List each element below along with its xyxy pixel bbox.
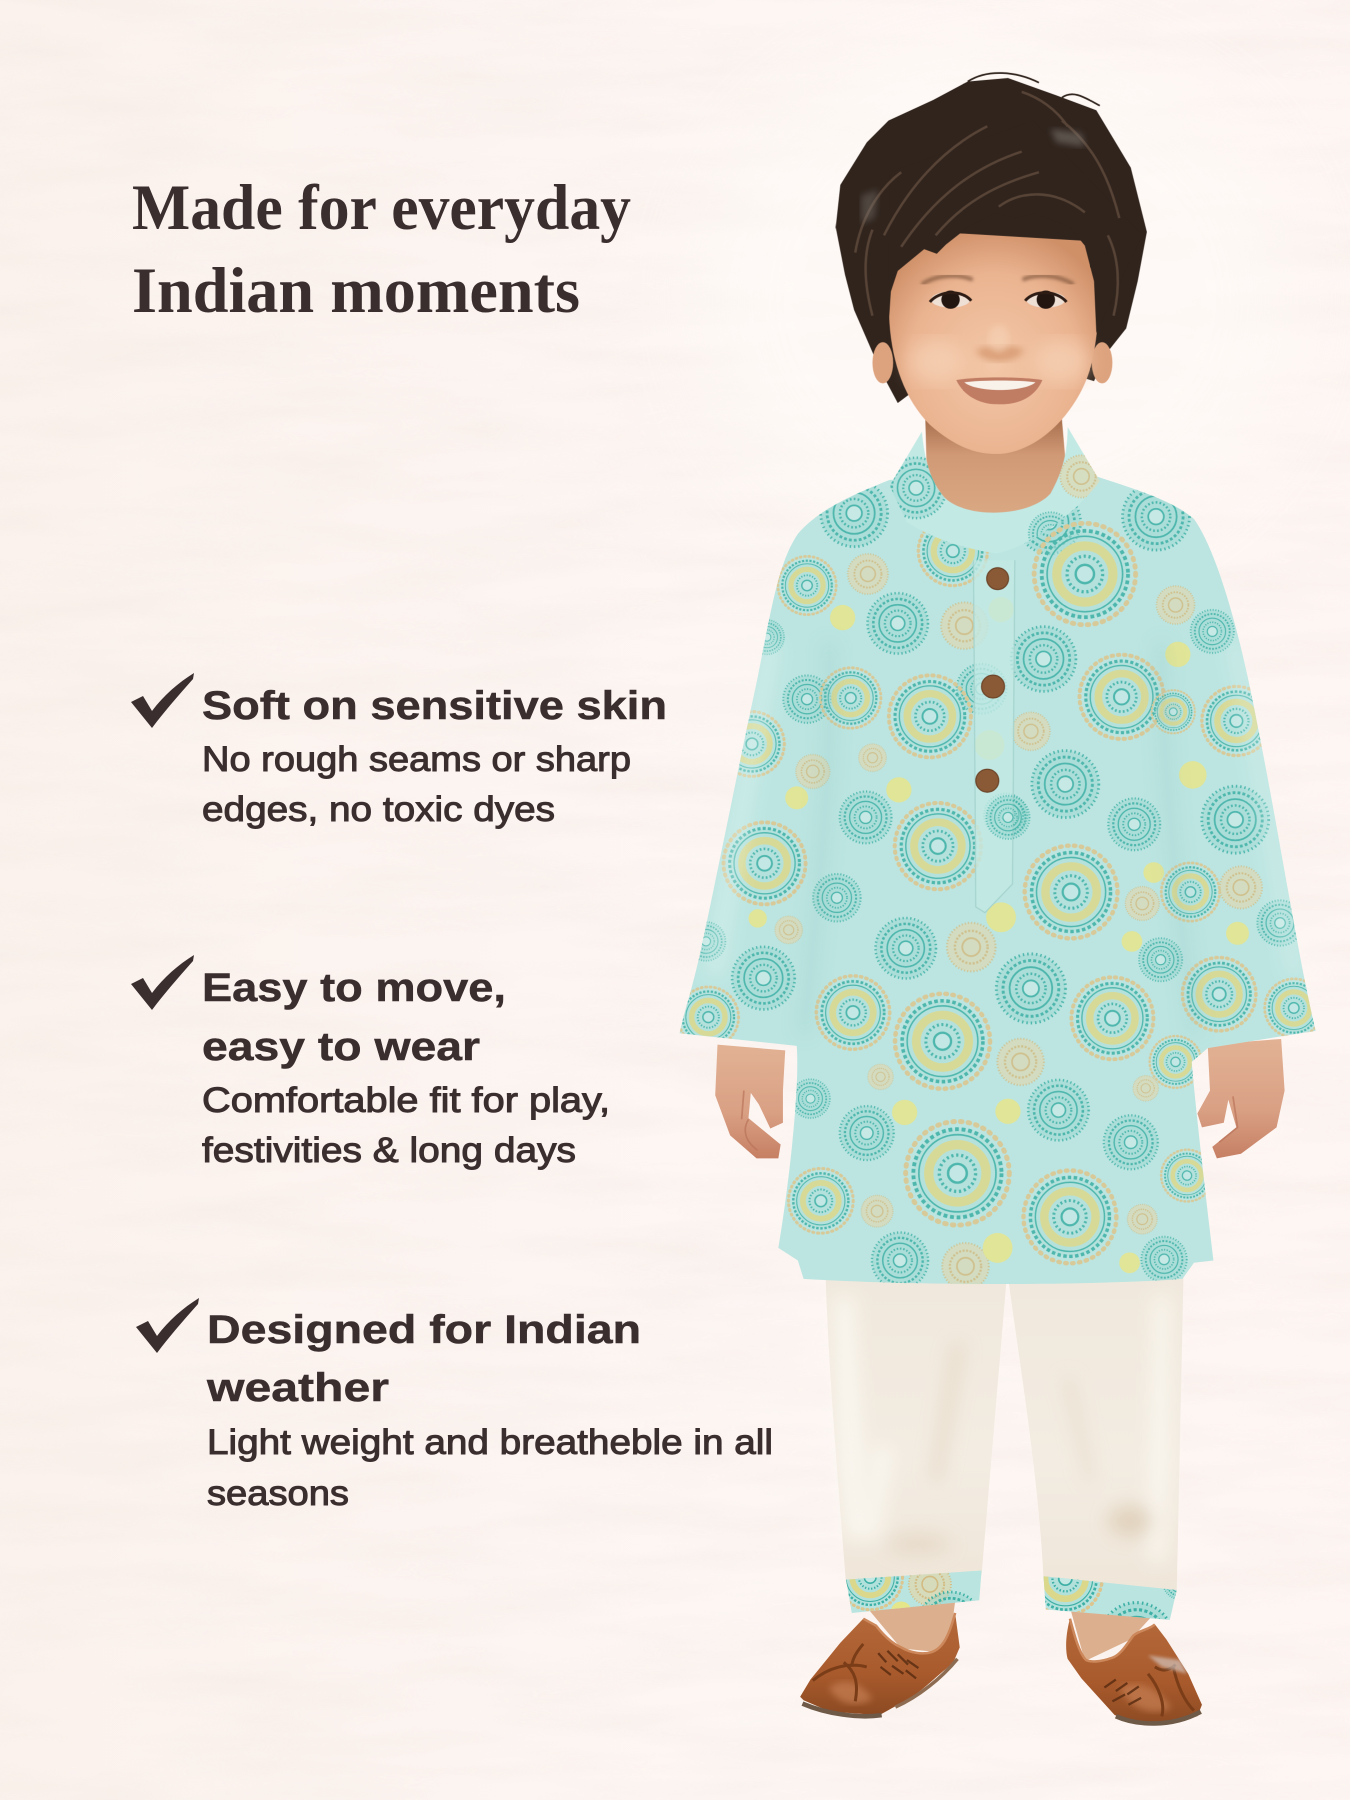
feature heading: Easy to move, <box>202 966 506 1010</box>
feature description <box>202 1081 610 1170</box>
hair fringe <box>855 73 1142 344</box>
kurta placket <box>974 560 1030 913</box>
title: Made for everyday <box>132 172 631 244</box>
nose <box>976 325 1024 361</box>
hands <box>715 1039 1285 1158</box>
title <box>132 172 631 327</box>
feature: easy to move <box>131 955 610 1170</box>
feature heading: Soft on sensitive skin <box>202 684 667 728</box>
kurta collar <box>886 427 1103 555</box>
feature: soft on sensitive skin <box>131 673 667 829</box>
buttons <box>976 568 1009 792</box>
title: Indian moments <box>132 255 580 327</box>
feature description: seasons <box>207 1474 349 1513</box>
ears <box>872 342 1112 383</box>
feature description: No rough seams or sharp <box>202 740 631 779</box>
pyjama trousers <box>825 1270 1184 1593</box>
kurta fabric <box>680 476 1316 1284</box>
feature heading: Designed for Indian <box>207 1308 641 1352</box>
eyebrows <box>923 276 1072 284</box>
feature description <box>207 1423 773 1513</box>
facial features <box>908 276 1089 404</box>
trouser cuffs <box>846 1570 1177 1620</box>
fabric shading <box>714 643 1295 1033</box>
feature description: Light weight and breatheble in all <box>207 1423 773 1462</box>
feature: designed for Indian weather <box>136 1298 773 1513</box>
illustration: smiling boy in kurta pyjama <box>678 73 1323 1725</box>
icon: check mark <box>136 1298 199 1353</box>
feature heading: easy to wear <box>202 1025 480 1069</box>
cheek highlights <box>908 339 1089 385</box>
icon: check mark <box>131 955 194 1010</box>
feature heading <box>202 966 506 1069</box>
icon: check mark <box>131 673 194 728</box>
feature description: festivities & long days <box>202 1131 576 1170</box>
mouth <box>956 377 1042 404</box>
shoes <box>800 1613 1202 1725</box>
face <box>889 230 1098 454</box>
feature description: edges, no toxic dyes <box>202 790 555 829</box>
feature description: Comfortable fit for play, <box>202 1081 610 1120</box>
kurta <box>678 476 1323 1289</box>
feature description <box>202 740 631 829</box>
kurta print motifs <box>678 480 1323 1289</box>
neck <box>925 419 1065 522</box>
eyes <box>930 290 1066 309</box>
feature heading: weather <box>206 1366 389 1410</box>
feet <box>867 1601 1155 1661</box>
feature heading <box>206 1308 641 1410</box>
hair back <box>836 78 1147 403</box>
